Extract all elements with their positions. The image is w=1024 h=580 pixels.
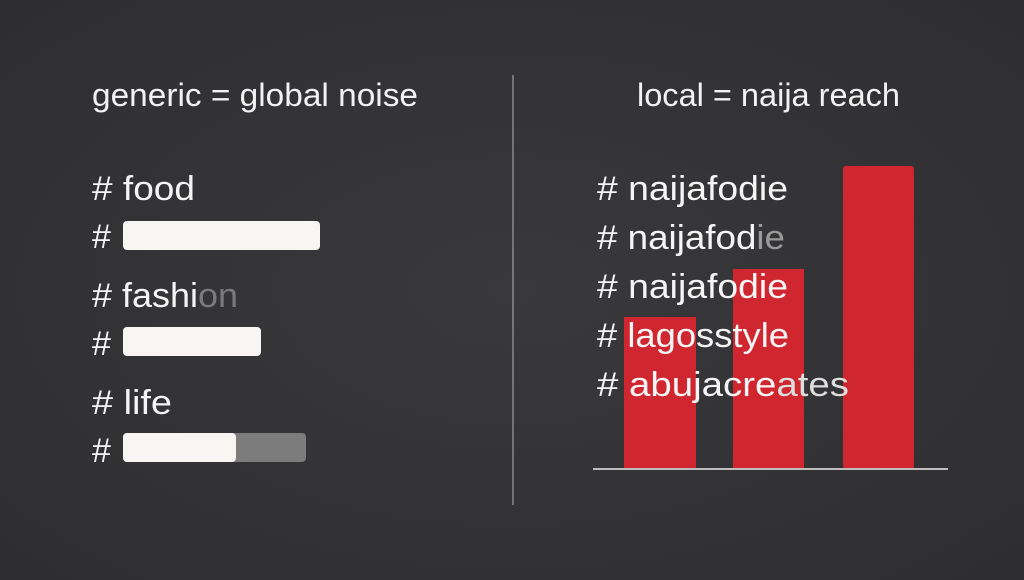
item: food: # food (92, 170, 195, 208)
hashtag list: # naijafodie (597, 170, 788, 208)
item: life: # (92, 432, 111, 470)
panel: generic (92, 77, 418, 470)
hashtag list: # abujacre ates (597, 366, 849, 404)
item: life: # life (92, 384, 172, 422)
bar chart (593, 166, 948, 469)
hashtag list: # naijafod ie (597, 219, 785, 257)
heading: generic: generic = global noise (92, 77, 418, 113)
item: life (92, 384, 306, 470)
panel: local (593, 77, 948, 469)
item: food: # (92, 218, 111, 256)
item: food (92, 170, 320, 256)
hashtag list: # naijafodie (597, 268, 788, 306)
hashtag list: # lagosstyle (597, 317, 789, 355)
item: fashion: # (92, 325, 111, 363)
heading: local: local = naija reach (637, 77, 900, 113)
hashtag list (597, 170, 849, 404)
item: fashion: # fashion (92, 277, 238, 315)
item: fashion (92, 277, 261, 363)
